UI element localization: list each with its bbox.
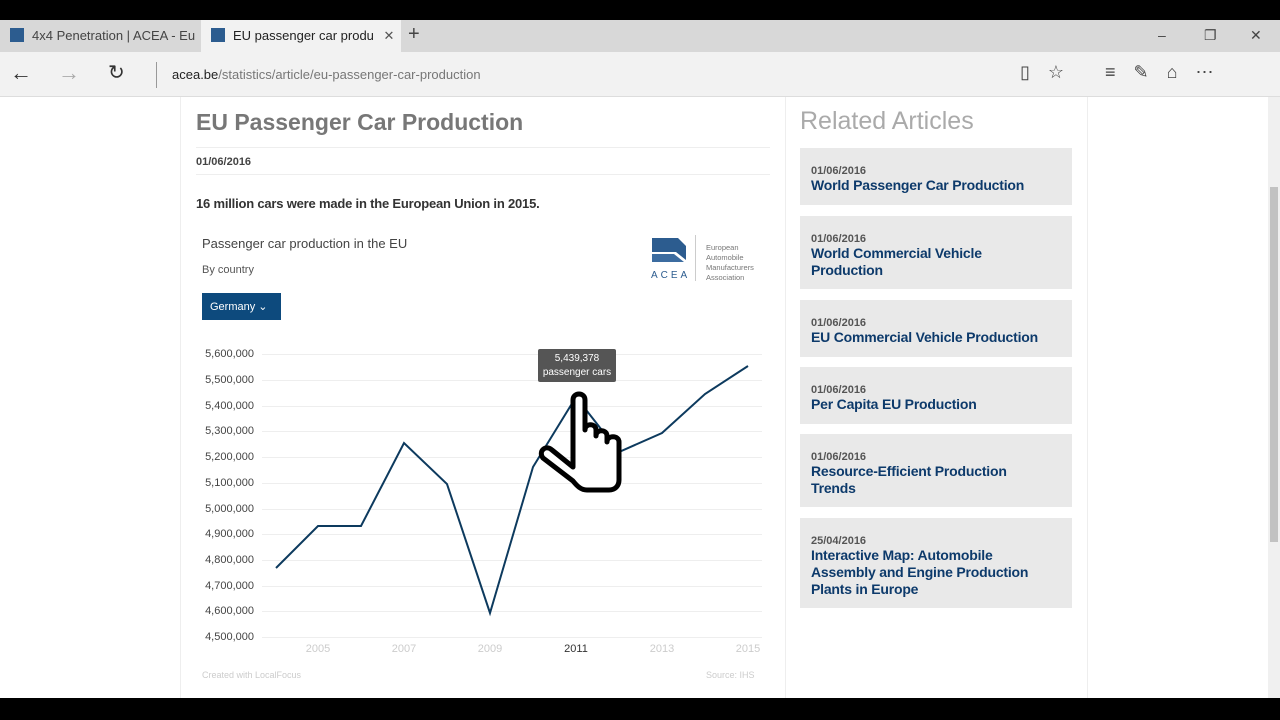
text: 2009 (478, 643, 502, 655)
text: 4,700,000 (205, 580, 254, 592)
address bar: ← (10, 60, 32, 85)
card 2: 01/06/2016 (811, 233, 866, 245)
card 6: Plants in Europe (811, 581, 918, 597)
window controls: ❐ (1204, 27, 1217, 43)
tab bar: + (408, 23, 420, 45)
card 6: Interactive Map: Automobile (811, 547, 993, 563)
text: By country (202, 264, 254, 276)
window controls: ✕ (1250, 27, 1262, 43)
ACEA logo: ACEA (651, 270, 690, 281)
ACEA logo (651, 235, 754, 282)
text: 2015 (736, 643, 760, 655)
text: 5,500,000 (205, 374, 254, 386)
dropdown: Germany ⌄ (210, 301, 268, 313)
text: 2007 (392, 643, 416, 655)
chart title: Passenger car production in the EU (202, 236, 407, 251)
card 1 (800, 148, 1072, 205)
date: 01/06/2016 (196, 156, 251, 168)
x axis labels (306, 643, 760, 655)
tooltip (538, 349, 616, 382)
window controls: – (1158, 27, 1166, 43)
tab: active (201, 20, 401, 52)
dropdown (202, 293, 281, 320)
text: Source: IHS (706, 670, 755, 680)
card 2: World Commercial Vehicle (811, 245, 982, 261)
card 6: Assembly and Engine Production (811, 564, 1028, 580)
text: 4,900,000 (205, 528, 254, 540)
card 6: 25/04/2016 (811, 535, 866, 547)
card 5: 01/06/2016 (811, 451, 866, 463)
tab: active: EU passenger car produ ✕ (233, 28, 394, 43)
icon: hand cursor (538, 392, 622, 492)
y axis labels (205, 348, 254, 643)
related articles heading: Related Articles (800, 107, 974, 135)
card 4: 01/06/2016 (811, 384, 866, 396)
card 1: World Passenger Car Production (811, 177, 1024, 193)
title: EU Passenger Car Production (196, 109, 523, 135)
tooltip: 5,439,378 (555, 353, 599, 364)
text: 5,400,000 (205, 400, 254, 412)
scrollbar (1268, 97, 1280, 698)
ACEA logo: Association (706, 273, 744, 282)
url: acea.be/statistics/article/eu-passenger-car-production (172, 67, 481, 82)
text: 5,300,000 (205, 425, 254, 437)
card 1: 01/06/2016 (811, 165, 866, 177)
text: 2013 (650, 643, 674, 655)
bottom bar (0, 698, 1280, 720)
card 6 (800, 518, 1072, 608)
ACEA logo: Manufacturers (706, 263, 754, 272)
card 5: Trends (811, 480, 856, 496)
address bar: → (58, 60, 80, 85)
footer credits: Created with LocalFocus (202, 670, 301, 680)
card 3 (800, 300, 1072, 357)
tooltip: passenger cars (543, 367, 611, 378)
card 2 (800, 216, 1072, 289)
text: 5,000,000 (205, 503, 254, 515)
ACEA logo: Automobile (706, 253, 744, 262)
address bar (0, 52, 1280, 97)
text: 2005 (306, 643, 330, 655)
card 5: Resource-Efficient Production (811, 463, 1007, 479)
text: 5,100,000 (205, 477, 254, 489)
window controls (1158, 27, 1262, 43)
content borders (180, 97, 181, 698)
address bar: ↻ (108, 62, 125, 84)
text: 4,800,000 (205, 554, 254, 566)
ACEA logo: European (706, 243, 739, 252)
card 4 (800, 367, 1072, 424)
lead text: 16 million cars were made in the European Union in 2015. (196, 196, 540, 211)
address bar: ▯☆ ≡✎⌂⋯ (1020, 62, 1232, 82)
text: 4,600,000 (205, 605, 254, 617)
text: 5,200,000 (205, 451, 254, 463)
tab bar (0, 20, 1280, 52)
card 3: EU Commercial Vehicle Production (811, 329, 1038, 345)
text: 5,600,000 (205, 348, 254, 360)
card 5 (800, 434, 1072, 507)
tab: inactive: 4x4 Penetration | ACEA - Eu (32, 28, 195, 43)
text: 2011 (564, 643, 588, 655)
card 4: Per Capita EU Production (811, 396, 977, 412)
card 3: 01/06/2016 (811, 317, 866, 329)
text: 4,500,000 (205, 631, 254, 643)
card 2: Production (811, 262, 883, 278)
top black bar (0, 0, 1280, 20)
